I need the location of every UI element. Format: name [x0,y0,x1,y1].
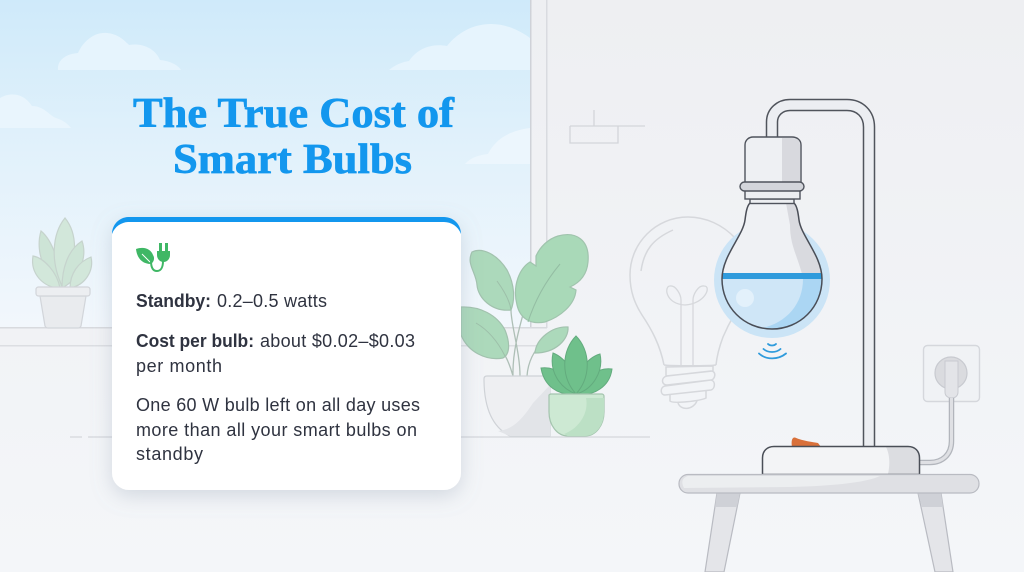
cost per bulb line: about $0.02–$0.03 [260,331,415,351]
bulb socket [740,137,804,204]
terracotta pot [40,296,86,328]
leaf lower left [461,307,509,359]
leaf small [535,327,568,353]
title: The True Cost of [133,91,455,137]
wall socket with plug [919,346,980,462]
leaf large [515,235,588,323]
standby line: Standby: [136,291,211,311]
cloud mid right [465,128,530,164]
cloud mid left [0,94,71,128]
table legs [705,493,953,572]
cloud top right [389,24,530,70]
wall bricks [570,110,645,143]
comparison text: more than all your smart bulbs on [136,420,417,440]
rocker switch [792,437,821,447]
small plant on sill [33,218,92,328]
comparison text [136,395,420,464]
leaf upper left [470,250,514,310]
standby line: 0.2–0.5 watts [217,291,327,311]
lamp arm [772,105,869,448]
shelf line [70,436,650,438]
icon: leaf and plug [136,243,170,271]
ghost incandescent bulb [630,217,735,408]
cloud top left [58,33,181,70]
succulent [541,336,612,394]
card blue top accent [112,217,461,234]
window sill [0,327,547,346]
wifi signal waves [759,344,786,358]
info card [112,217,461,490]
table top [679,474,979,493]
power cord [919,398,952,462]
title: Smart Bulbs [173,137,412,183]
window with sky [0,0,548,328]
standby line [136,291,327,311]
large leafy plant [461,235,612,436]
glow behind bulb [714,222,830,338]
cost per bulb line [136,331,415,376]
cost per bulb line: per month [136,356,222,376]
comparison text: One 60 W bulb left on all day uses [136,395,420,415]
comparison text: standby [136,444,203,464]
white pot [484,376,550,436]
cost per bulb line: Cost per bulb: [136,331,254,351]
green pot [549,394,604,436]
title [133,91,455,183]
lamp base [762,446,920,474]
smart bulb [721,136,823,330]
